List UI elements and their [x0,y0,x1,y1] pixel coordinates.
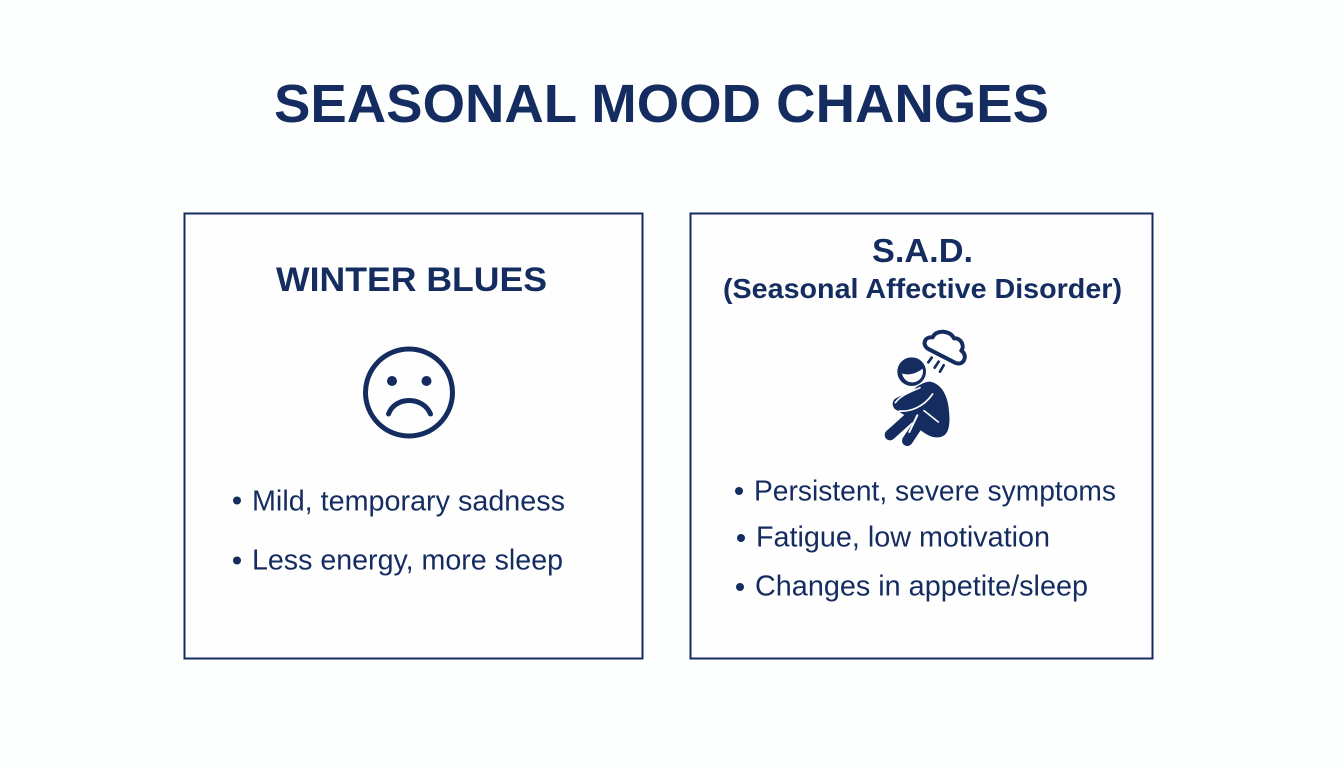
heading: S.A.D.: S.A.D. [872,232,973,269]
heading: S.A.D.: (Seasonal Affective Disorder) [723,273,1122,304]
title: SEASONAL MOOD CHANGES [274,74,1049,134]
heading: winter blues: WINTER BLUES [276,261,547,299]
bullet list: S.A.D. symptoms: Fatigue, low motivation [756,522,1050,554]
bullet list: S.A.D. symptoms: Changes in appetite/sleep [755,570,1088,602]
icon: seated person under rain cloud [890,332,965,441]
panel: winter blues [184,214,642,658]
cloud [925,332,965,363]
body and legs [890,382,949,441]
panel: S.A.D. [690,214,1152,658]
heading: S.A.D. [723,232,1122,304]
bullet list: S.A.D. symptoms: Persistent, severe symptoms [754,476,1116,508]
bullet list: winter blues symptoms: Mild, temporary sadness [252,486,565,518]
bullet list: S.A.D. symptoms [735,476,1116,602]
bullet list: winter blues symptoms: Less energy, more sleep [252,544,563,576]
bullet list: winter blues symptoms [233,486,565,576]
icon: sad face [366,349,452,436]
head [897,357,926,386]
rain [928,358,944,372]
